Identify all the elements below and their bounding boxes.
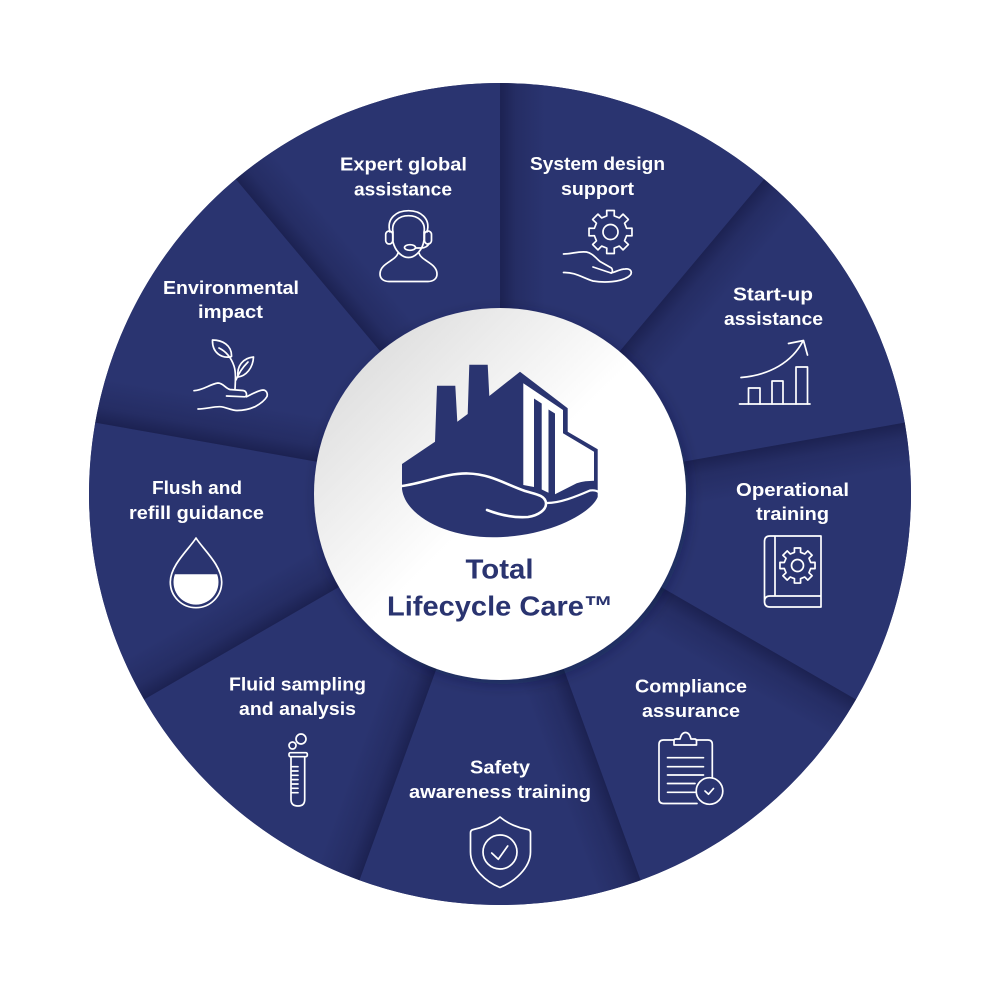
label: System design	[530, 153, 665, 174]
segment wedge	[500, 83, 764, 494]
icon: test tube	[289, 734, 307, 806]
label: Expert global	[340, 154, 467, 174]
icon: shield with check	[470, 817, 530, 888]
icon: growth chart	[740, 340, 810, 404]
label	[409, 756, 591, 802]
icon: hand with gear	[564, 211, 632, 282]
label: training	[756, 503, 829, 524]
segment wedge	[236, 9, 702, 494]
label: Environmental	[163, 277, 299, 298]
label	[163, 277, 299, 322]
panel: expert global assistance	[236, 9, 702, 494]
panel: safety awareness training	[252, 494, 641, 971]
label: Flush and	[152, 477, 242, 498]
label: Operational	[736, 479, 849, 500]
title	[387, 554, 613, 622]
label: support	[561, 178, 634, 199]
label	[530, 153, 665, 199]
centre circle	[314, 308, 686, 680]
label: assistance	[724, 308, 823, 329]
icon: factory on a hand	[402, 365, 598, 537]
icon: manual with gear	[764, 536, 821, 607]
label: Fluid sampling	[229, 674, 366, 694]
label	[229, 674, 366, 719]
icon: half-filled drop	[170, 538, 222, 608]
segment wedge	[12, 265, 500, 700]
icon: headset agent	[380, 211, 437, 282]
segment wedge	[252, 494, 641, 971]
label: awareness training	[409, 781, 591, 802]
label	[340, 154, 467, 200]
title: Total	[466, 554, 534, 584]
label: assurance	[642, 700, 740, 721]
panel: environmental impact	[95, 162, 546, 494]
panel: compliance assurance	[368, 494, 856, 928]
segment wedge	[500, 423, 951, 754]
wheel base disc	[89, 83, 911, 905]
segment wedge	[500, 179, 967, 664]
panel: system design support	[500, 83, 764, 494]
label: and analysis	[239, 698, 356, 719]
label: Compliance	[635, 676, 747, 696]
label	[635, 676, 747, 721]
label: refill guidance	[129, 502, 264, 523]
panel: start-up assistance	[500, 179, 967, 664]
label	[736, 479, 849, 524]
segment wedge	[111, 404, 500, 880]
label: Start-up	[733, 284, 813, 304]
segment wedge	[95, 162, 546, 494]
icon: clipboard with check	[659, 732, 723, 804]
disc	[314, 308, 686, 680]
label: Safety	[470, 756, 531, 778]
panel: operational training	[500, 423, 951, 754]
label: assistance	[354, 178, 452, 200]
panel: flush and refill guidance	[12, 265, 500, 700]
title: Lifecycle Care™	[387, 590, 613, 622]
icon: seedling in hand	[194, 340, 267, 410]
label	[724, 284, 823, 329]
label: impact	[198, 301, 263, 322]
label	[129, 477, 264, 523]
segment wedge	[368, 494, 856, 928]
panel: fluid sampling and analysis	[111, 404, 500, 880]
